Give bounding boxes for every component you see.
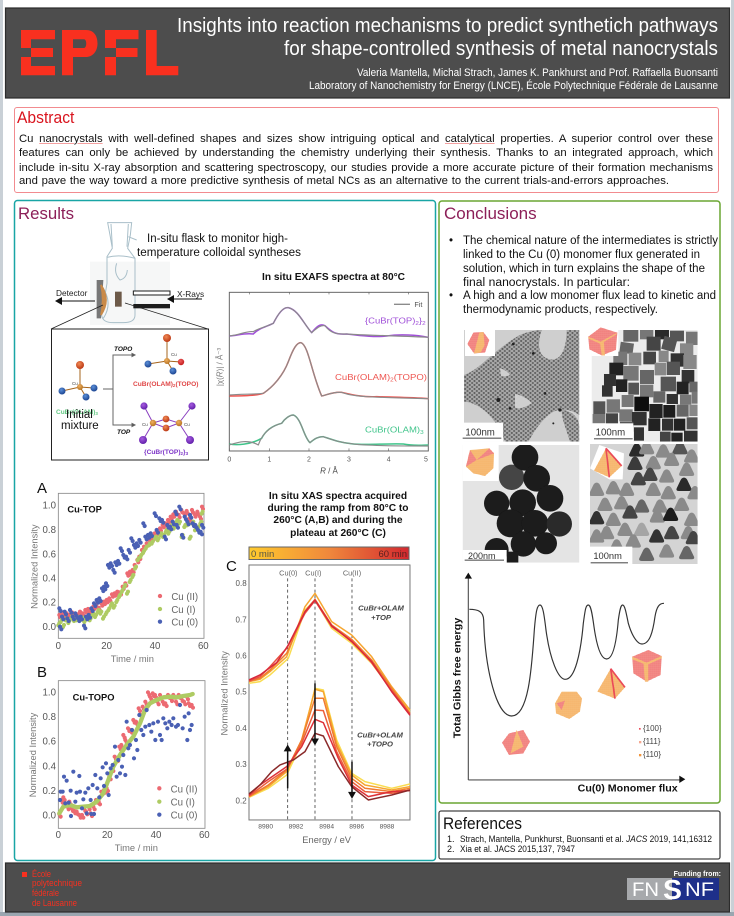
XAS chart C: 0.6 [236, 652, 247, 661]
scatter chart B: Cu-TOPO: Cu-TOPO [73, 692, 114, 702]
abstract text: features can only be achieved by understanding the chemistry underlying their synthesis. Thanks to an integrated approach, which [19, 147, 713, 159]
TOPO label: TOPO [114, 346, 132, 353]
footer EPFL address: École [32, 869, 51, 879]
initial mixture label: 3 [95, 411, 98, 416]
XAS chart C: 0.7 [236, 615, 247, 624]
initial molecule [58, 361, 98, 400]
x-rays arrow: X-Rays [177, 289, 204, 299]
TOPO molecule label: CuBr(OLAM) [133, 381, 173, 388]
nanocrystal: octahedron [555, 692, 582, 719]
conclusions bullets: The chemical nature of the intermediates is strictly [463, 235, 718, 247]
title [177, 15, 718, 60]
heading: EXAFS: In situ EXAFS spectra at 80°C [262, 271, 405, 283]
flask caption: In-situ flask to monitor high- [147, 233, 288, 245]
panel: results [14, 200, 436, 860]
scatter chart A: Cu-TOP [29, 493, 209, 664]
EPFL logo [21, 30, 178, 75]
EXAFS chart: CuBr(OLAM) [335, 373, 381, 382]
initial mixture label: CuBr(OLAM) [56, 409, 95, 416]
scatter chart B: Cu-TOPO: 40 [151, 830, 161, 841]
EXAFS chart: R / Å [320, 466, 339, 475]
footer banner [6, 863, 730, 912]
XAS chart C: CuBr+OLAM [358, 604, 404, 613]
EXAFS chart: (TOPO) [394, 373, 427, 382]
reference list: 1. [447, 834, 455, 844]
reference list [447, 834, 712, 854]
conclusions bullets [449, 235, 718, 316]
EXAFS chart: } [419, 317, 423, 326]
scatter chart A: Cu-TOP: 0.6 [43, 549, 56, 560]
XAS chart C: +TOPO [367, 740, 393, 749]
x-rays arrow [167, 289, 204, 303]
inset: cube [588, 327, 618, 356]
inset: tetrahedron [590, 445, 624, 479]
label C: C [226, 558, 237, 575]
nanocrystal: tetrahedron [597, 669, 625, 699]
energy curve [469, 603, 664, 716]
panel: abstract [14, 107, 719, 193]
conclusions bullets: final nanocrystals. In particular: [463, 277, 630, 289]
XAS chart C: CuBr+OLAM [357, 730, 403, 739]
inset: octahedron [463, 445, 499, 481]
detector arrow [55, 288, 95, 305]
scatter chart B: Cu-TOPO: 60 [199, 830, 210, 841]
XAS chart C [220, 565, 410, 845]
EXAFS chart: 2 [422, 321, 426, 327]
conclusions bullets: linked to the Cu (0) monomer flux generated in [463, 249, 700, 261]
scatter chart A: Cu-TOP: 0.8 [43, 525, 56, 536]
XAS chart C: 0.5 [236, 688, 247, 697]
EXAFS chart: 2 [415, 321, 419, 327]
EXAFS chart: {CuBr(TOP) [365, 317, 407, 326]
scatter chart B: Cu-TOPO: 0.6 [43, 737, 56, 748]
authors and affiliation [309, 67, 718, 92]
scatter chart A: Cu-TOP: 0.0 [43, 622, 56, 633]
time colour bar: 0 min [251, 549, 274, 560]
footer EPFL address: de Lausanne [32, 898, 77, 908]
EXAFS chart: 2 [307, 456, 311, 463]
scatter chart A: Cu-TOP: Cu (0) [171, 618, 198, 629]
EXAFS chart: CuBr(OLAM) [365, 426, 411, 435]
scatter chart B: Cu-TOPO: Cu (I) [171, 797, 195, 808]
branching arrows [103, 353, 135, 427]
TOP label: TOP [117, 429, 131, 436]
heading: results: Results [18, 204, 74, 223]
scatter chart B: Cu-TOPO: 0.4 [43, 761, 57, 772]
TOP molecule label: 2 [181, 451, 184, 456]
scatter chart A: Cu-TOP: 1.0 [43, 501, 56, 512]
EXAFS chart: 2 [390, 377, 394, 383]
TOP molecule label: } [183, 449, 186, 456]
scatter chart B: Cu-TOPO: Time / min [115, 843, 158, 853]
scatter chart A: Cu-TOP: 60 [198, 641, 209, 652]
TOPO molecule label: 2 [173, 383, 176, 388]
panel: conclusions [439, 201, 720, 803]
abstract text: and pave the way toward a more predictive synthesis of metal NCs as an alternative to the current trials-and-errors approaches. [19, 175, 669, 187]
micrographs [463, 327, 703, 564]
XAS chart C: 8980 [258, 824, 273, 831]
EXAFS chart [216, 292, 428, 475]
EXAFS chart: 5 [424, 456, 428, 463]
reference list: 2. [447, 844, 455, 854]
XAS chart C: Normalized Intensity [220, 651, 230, 736]
energy landscape diagram [453, 573, 685, 795]
XAS chart C: Cu(I) [305, 569, 321, 578]
zoom lines [51, 303, 208, 329]
facet legend: {111} [643, 737, 661, 746]
XAS chart C: Energy / eV [302, 835, 352, 845]
scatter chart B: Cu-TOPO: Cu (0) [171, 810, 197, 821]
scatter chart B: Cu-TOPO [28, 681, 210, 853]
scatter chart A: Cu-TOP: Cu-TOP [67, 504, 102, 514]
initial mixture label [56, 409, 99, 432]
heading: abstract: Abstract [17, 108, 74, 127]
micrograph: tetrahedra 100 nm: 100nm [593, 551, 622, 561]
XAS chart C: 0.2 [236, 796, 247, 805]
micrograph: cubes 100 nm: 100nm [596, 428, 625, 439]
TOP molecule: Cu [142, 422, 148, 427]
XAS chart C: Cu(II) [343, 569, 361, 578]
scatter chart B: Cu-TOPO: 0.0 [43, 811, 56, 822]
XAS chart C: +TOP [371, 613, 392, 622]
heading: references: References [443, 814, 522, 833]
scatter chart A: Cu-TOP: 0 [56, 641, 61, 652]
micrograph: tetrahedra 100 nm [589, 441, 703, 564]
micrograph: octahedra 200 nm: 200nm [468, 551, 495, 561]
XAS chart C: 0.8 [236, 579, 247, 588]
scatter chart B: Cu-TOPO: 20 [102, 830, 113, 841]
TOP molecule label: 3 [186, 451, 189, 456]
scatter chart B: Cu-TOPO: 1.0 [43, 687, 56, 698]
panel: references [439, 811, 720, 859]
conclusions bullets: • [449, 235, 453, 247]
abstract text: include in-situ X-ray absorption and scattering spectroscopy, our studies provide a more accurate picture of their formation mechanisms [19, 162, 713, 174]
XAS chart C: 8986 [349, 824, 364, 831]
micrograph: spheres 100 nm [463, 329, 579, 442]
EXAFS chart: 1 [267, 456, 271, 463]
abstract text: Cu nanocrystals with well-defined shapes and sizes show intriguing optical and catalytical properties. A superior control over these [19, 133, 713, 145]
conclusions bullets: A high and a low monomer flux lead to kinetic and [463, 290, 716, 302]
FNSNF logo: S [663, 874, 682, 905]
nanocrystal: truncated cube [502, 730, 530, 755]
nanocrystal: cube [632, 650, 662, 682]
flask caption [137, 233, 301, 259]
title: for shape-controlled synthesis of metal nanocrystals [284, 38, 718, 60]
detector arrow: Detector [56, 288, 88, 298]
heading: conclusions: Conclusions [444, 204, 537, 223]
conclusions bullets: solution, which in turn explains the shape of the [463, 263, 705, 275]
scatter chart B: Cu-TOPO: 0.8 [43, 712, 56, 723]
XAS chart C: 8988 [380, 824, 395, 831]
initial mixture label: mixture [61, 420, 99, 432]
funding label: Funding from: [674, 871, 721, 878]
footer EPFL address [22, 869, 82, 908]
FNSNF logo: NF [685, 880, 714, 901]
reference list: Xia et al. JACS 2015,137, 7947 [460, 844, 575, 854]
EXAFS chart: 3 [420, 430, 424, 436]
TOP molecule label: {CuBr(TOP) [144, 449, 181, 456]
footer EPFL address: fédérale [32, 888, 59, 898]
EXAFS chart: |χ(R)| / Å⁻³ [216, 347, 225, 386]
TOPO molecule label: (TOPO) [175, 381, 198, 388]
conclusions bullets: thermodynamic products, respectively. [463, 304, 658, 316]
scatter chart A: Cu-TOP: 20 [101, 641, 112, 652]
scatter chart A: Cu-TOP: Normalized Intensity [29, 524, 39, 609]
XAS title: during the ramp from 80°C to [267, 503, 409, 514]
x axis label: Cu(0) Monomer flux [578, 784, 678, 795]
conclusions bullets: • [449, 290, 453, 302]
XAS title [267, 491, 409, 539]
facet legend: {110} [643, 750, 661, 759]
scatter chart B: Cu-TOPO: 0.2 [43, 786, 56, 797]
facet legend [639, 724, 662, 759]
XAS chart C: 0.3 [236, 760, 247, 769]
abstract text [19, 133, 713, 187]
time colour bar: 60 min [378, 549, 407, 560]
micrograph: octahedra 200 nm [463, 444, 579, 563]
axes [465, 573, 685, 783]
FNSNF logo: FN [632, 880, 659, 901]
EXAFS chart: 4 [387, 456, 391, 463]
XAS title: In situ XAS spectra acquired [269, 491, 407, 502]
header banner [6, 8, 730, 98]
scatter chart A: Cu-TOP: 40 [150, 641, 160, 652]
label A: A [37, 480, 47, 497]
scatter chart A: Cu-TOP: Cu (II) [171, 592, 198, 603]
FNSNF logo [627, 874, 719, 905]
XAS chart C: 0.4 [236, 724, 247, 733]
inset: truncated cube [465, 329, 495, 356]
EXAFS chart: Fit [414, 300, 422, 309]
XAS chart C: 8984 [319, 824, 334, 831]
scatter chart A: Cu-TOP: 0.4 [43, 573, 57, 584]
scatter chart B: Cu-TOPO: Cu (II) [171, 784, 197, 795]
flask photo [90, 223, 170, 325]
micrograph: cubes 100 nm [588, 327, 698, 442]
scatter chart A: Cu-TOP: Time / min [111, 654, 154, 664]
TOP molecule: Cu [184, 422, 190, 427]
micrograph: spheres 100 nm: 100nm [465, 427, 495, 438]
scatter chart A: Cu-TOP: 0.2 [43, 598, 56, 609]
y axis label: Total Gibbs free energy [453, 617, 464, 738]
flask caption: temperature colloidal syntheses [137, 247, 301, 259]
scatter chart B: Cu-TOPO: Normalized Intensity [28, 712, 38, 797]
label B: B [37, 664, 47, 681]
EXAFS chart: 0 [227, 456, 231, 463]
time colour bar [249, 547, 409, 560]
footer EPFL address: polytechnique [32, 878, 82, 888]
scatter chart A: Cu-TOP: Cu (I) [171, 605, 195, 616]
TOP molecule [139, 402, 196, 444]
XAS title: plateau at 260°C (C) [290, 528, 386, 539]
initial molecule: Cu [72, 381, 78, 386]
TOPO molecule [144, 334, 184, 374]
XAS chart C: Cu(0) [279, 569, 297, 578]
XAS title: 260°C (A,B) and during the [273, 515, 403, 526]
EXAFS chart: 3 [347, 456, 351, 463]
scheme box [52, 329, 208, 460]
initial mixture label: Initial [66, 409, 93, 421]
XAS chart C: 8982 [289, 824, 304, 831]
reference list: Strach, Mantella, Punkhurst, Buonsanti et al. JACS 2019, 141,16312 [460, 834, 712, 844]
scatter chart B: Cu-TOPO: 0 [56, 830, 61, 841]
facet legend: {100} [643, 724, 662, 733]
TOPO molecule: Cu [171, 352, 177, 357]
